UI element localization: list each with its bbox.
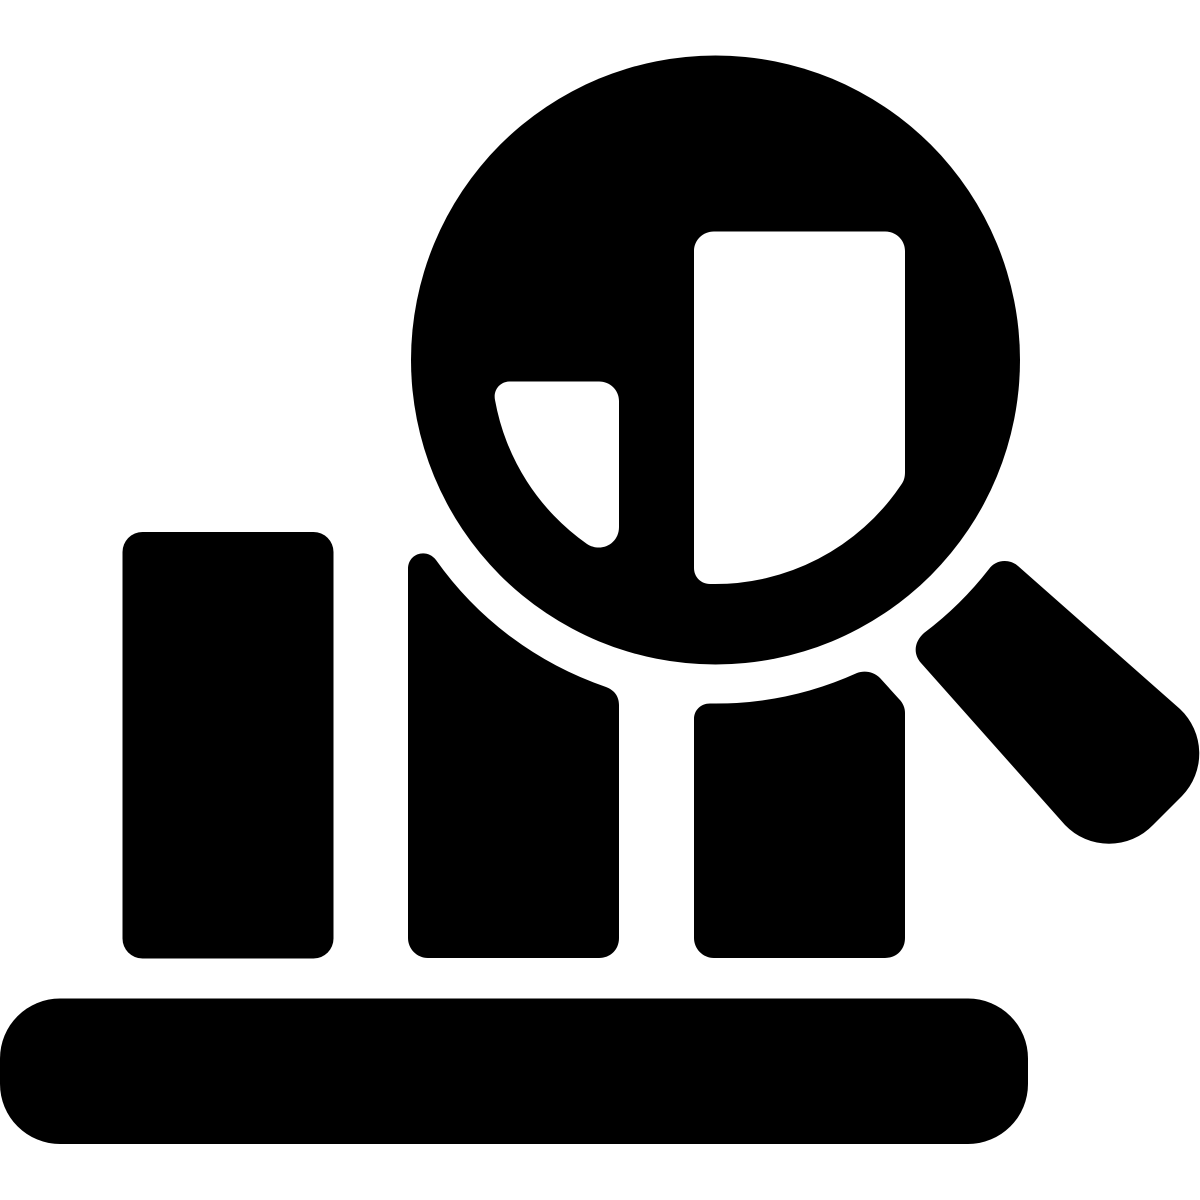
first bar (122, 532, 334, 958)
baseline bar (0, 998, 1028, 1144)
lens cutout: small bar (495, 382, 619, 548)
magnifier handle (916, 561, 1199, 844)
second bar (408, 553, 619, 958)
lens cutout: tall bar (694, 232, 905, 584)
third bar (694, 672, 905, 958)
magnifier lens (411, 56, 1020, 664)
